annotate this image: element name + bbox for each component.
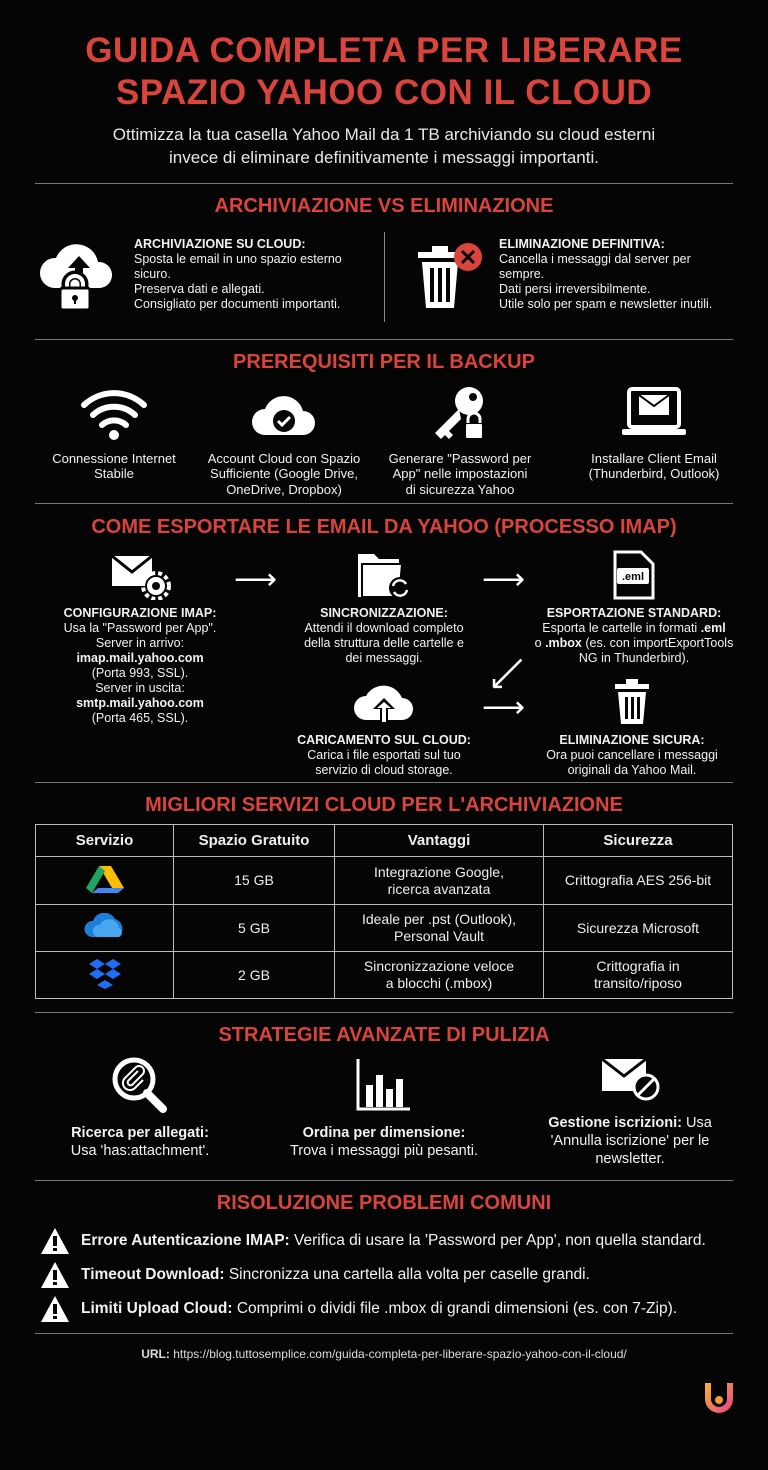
prereq: cloud account: Account Cloud con Spazio xyxy=(208,450,360,466)
prereq: cloud account xyxy=(208,396,360,496)
table: cloud services: Integrazione Google, xyxy=(374,864,504,880)
table: cloud services: Personal Vault xyxy=(394,928,484,944)
problem: imap xyxy=(41,1228,706,1254)
heading: risoluzione problemi: RISOLUZIONE PROBLEMI COMUNI xyxy=(217,1192,551,1214)
table: cloud services: Sincronizzazione veloce xyxy=(364,958,514,974)
step: sincronizzazione: della struttura delle cartelle e xyxy=(304,636,464,650)
step: configurazione imap: Server in arrivo: xyxy=(96,636,184,650)
icon: trash with x xyxy=(418,243,482,308)
problem: timeout: Timeout Download: Sincronizza una cartella alla volta per caselle grandi. xyxy=(81,1266,590,1283)
problem list xyxy=(41,1228,706,1322)
table: cloud services: Spazio Gratuito xyxy=(199,832,309,849)
step: esportazione: .eml xyxy=(622,571,644,583)
prereq: cloud account: Sufficiente (Google Drive, xyxy=(210,466,358,481)
step: configurazione imap: Usa la "Password per App". xyxy=(64,621,216,635)
step: esportazione: ESPORTAZIONE STANDARD: xyxy=(547,606,721,620)
table: cloud services: Vantaggi xyxy=(408,832,470,849)
table: cloud services: 15 GB xyxy=(234,872,274,888)
prereq: key lock: Generare "Password per xyxy=(389,450,531,466)
text: archiviazione su cloud: Sposta le email in uno spazio esterno sicuro. xyxy=(134,252,342,281)
strategy: allegati: Ricerca per allegati: xyxy=(71,1125,209,1141)
problem: imap: Errore Autenticazione IMAP: Verifica di usare la 'Password per App', non quella standard. xyxy=(81,1232,706,1249)
table: cloud services: 2 GB xyxy=(238,966,270,982)
table: cloud services: a blocchi (.mbox) xyxy=(386,975,492,991)
step: esportazione: o .mbox (es. con importExportTools xyxy=(535,636,733,650)
step: sincronizzazione: dei messaggi. xyxy=(345,651,423,665)
table: cloud services: 5 GB xyxy=(238,920,270,936)
step: configurazione imap xyxy=(64,556,216,725)
step: eliminazione sicura: originali da Yahoo Mail. xyxy=(568,763,696,777)
strategy: iscrizioni: newsletter. xyxy=(595,1151,665,1167)
step: caricamento: CARICAMENTO SUL CLOUD: xyxy=(297,733,471,747)
step: caricamento: servizio di cloud storage. xyxy=(315,763,453,777)
text: eliminazione definitiva: Cancella i messaggi dal server per sempre. xyxy=(499,252,691,281)
prereq: wifi xyxy=(52,390,176,481)
table: cloud services: Servizio xyxy=(76,832,133,849)
title: GUIDA COMPLETA PER LIBERARE xyxy=(85,31,683,70)
strategy: iscrizioni: 'Annulla iscrizione' per le xyxy=(551,1133,709,1149)
prereq: wifi: Connessione Internet xyxy=(52,450,176,466)
prereq: key lock: di sicurezza Yahoo xyxy=(406,482,514,496)
text: archiviazione su cloud: Consigliato per documenti importanti. xyxy=(134,297,340,311)
step: sincronizzazione: Attendi il download completo xyxy=(304,621,464,635)
table: cloud services xyxy=(35,824,733,999)
prereq: email client: (Thunderbird, Outlook) xyxy=(589,466,719,481)
step: configurazione imap: Server in uscita: xyxy=(95,681,185,695)
strategy: allegati: Usa 'has:attachment'. xyxy=(71,1143,209,1159)
step: configurazione imap: CONFIGURAZIONE IMAP: xyxy=(64,606,216,620)
step: eliminazione sicura: ELIMINAZIONE SICURA: xyxy=(559,733,705,747)
table: cloud services: Sicurezza xyxy=(603,832,673,849)
problem: upload: Limiti Upload Cloud: Comprimi o dividi file .mbox di grandi dimensioni (es. con 7-Zip). xyxy=(81,1300,677,1317)
title xyxy=(85,31,683,112)
strategy: iscrizioni: Gestione iscrizioni: Usa xyxy=(548,1115,712,1131)
step: eliminazione sicura xyxy=(546,679,718,777)
step: configurazione imap: smtp.mail.yahoo.com xyxy=(76,696,204,710)
heading: strategie: STRATEGIE AVANZATE DI PULIZIA xyxy=(218,1024,550,1046)
step: configurazione imap: (Porta 465, SSL). xyxy=(92,711,188,725)
heading: prerequisiti: PREREQUISITI PER IL BACKUP xyxy=(233,351,535,373)
step: caricamento xyxy=(297,686,471,777)
prereq: key lock xyxy=(389,387,532,496)
text: eliminazione definitiva: Utile solo per spam e newsletter inutili. xyxy=(499,297,712,311)
step: eliminazione sicura: Ora puoi cancellare i messaggi xyxy=(546,748,718,762)
step: esportazione: NG in Thunderbird). xyxy=(579,651,689,665)
prereq: cloud account: OneDrive, Dropbox) xyxy=(226,482,342,496)
icon: cloud lock xyxy=(40,244,112,308)
table: cloud services: Crittografia in xyxy=(596,958,680,974)
subtitle xyxy=(113,125,655,167)
title: SPAZIO YAHOO CON IL CLOUD xyxy=(116,73,652,112)
heading: processo imap: COME ESPORTARE LE EMAIL DA YAHOO (PROCESSO IMAP) xyxy=(91,516,677,538)
problem: timeout xyxy=(41,1262,590,1288)
table: cloud services: Sicurezza Microsoft xyxy=(577,920,699,936)
strategy: dimensione: Ordina per dimensione: xyxy=(303,1125,465,1141)
strategy: allegati xyxy=(71,1058,209,1159)
prereq: key lock: App" nelle impostazioni xyxy=(393,466,527,481)
table: cloud services: Ideale per .pst (Outlook), xyxy=(362,911,516,927)
prereq: email client: Installare Client Email xyxy=(591,450,717,466)
strategy: dimensione: Trova i messaggi più pesanti. xyxy=(290,1143,478,1159)
step: esportazione xyxy=(535,550,733,665)
step: esportazione: Esporta le cartelle in formati .eml xyxy=(542,621,726,635)
table: cloud services: transito/riposo xyxy=(594,975,682,991)
arrow: ⟶ xyxy=(234,563,277,596)
heading: servizi cloud: MIGLIORI SERVIZI CLOUD PER L'ARCHIVIAZIONE xyxy=(145,794,623,816)
step: sincronizzazione xyxy=(304,554,464,665)
url footer: URL: https://blog.tuttosemplice.com/guida-completa-per-liberare-spazio-yahoo-con-il-cloud/ xyxy=(141,1347,627,1361)
step: configurazione imap: imap.mail.yahoo.com xyxy=(76,651,204,665)
strategy: dimensione xyxy=(290,1059,478,1159)
table: cloud services: Crittografia AES 256-bit xyxy=(565,872,711,888)
table: cloud services: ricerca avanzata xyxy=(388,880,490,896)
step: sincronizzazione: SINCRONIZZAZIONE: xyxy=(320,606,448,620)
strategy: iscrizioni xyxy=(548,1059,712,1167)
text: eliminazione definitiva: Dati persi irreversibilmente. xyxy=(499,282,650,296)
subtitle: invece di eliminare definitivamente i messaggi importanti. xyxy=(169,148,599,167)
step: configurazione imap: (Porta 993, SSL). xyxy=(92,666,188,680)
problem: upload xyxy=(41,1296,677,1322)
arrow: ⟶ xyxy=(482,691,525,724)
text: eliminazione definitiva xyxy=(499,237,712,311)
heading: archiviazione vs eliminazione: ARCHIVIAZIONE VS ELIMINAZIONE xyxy=(215,195,553,217)
prereq: wifi: Stabile xyxy=(94,466,134,481)
text: archiviazione su cloud xyxy=(134,237,342,311)
arrow: ⟶ xyxy=(482,563,525,596)
text: eliminazione definitiva: ELIMINAZIONE DEFINITIVA: xyxy=(499,237,665,251)
step: caricamento: Carica i file esportati sul tuo xyxy=(307,748,461,762)
text: archiviazione su cloud: ARCHIVIAZIONE SU CLOUD: xyxy=(134,237,306,251)
text: archiviazione su cloud: Preserva dati e allegati. xyxy=(134,282,265,296)
arrow diagonal: ⟶ xyxy=(481,647,534,700)
prereq: email client xyxy=(589,387,719,481)
subtitle: Ottimizza la tua casella Yahoo Mail da 1 TB archiviando su cloud esterni xyxy=(113,125,655,144)
logo xyxy=(705,1383,733,1413)
